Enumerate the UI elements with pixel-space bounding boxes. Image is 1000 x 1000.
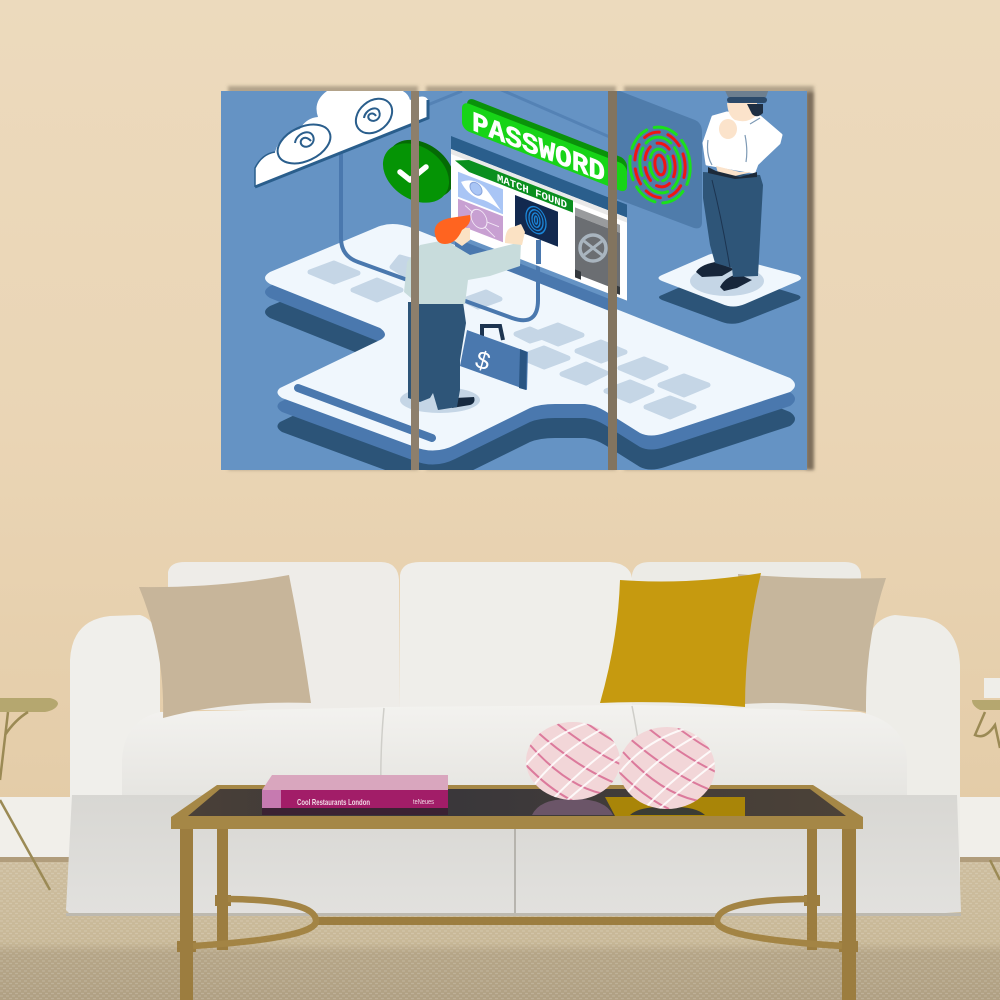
guard face bbox=[727, 103, 757, 121]
yellow pillow reflection bbox=[605, 797, 745, 816]
platform top surface bbox=[265, 224, 795, 451]
man shirt bbox=[404, 240, 521, 304]
screen body bbox=[451, 149, 627, 301]
pillow yellow bbox=[600, 573, 761, 707]
guard cap bbox=[725, 91, 768, 103]
floor edge bbox=[0, 857, 1000, 862]
guard belt bbox=[708, 167, 757, 179]
pillow left bbox=[139, 575, 311, 718]
canvas background bbox=[221, 91, 807, 470]
table glass bbox=[188, 789, 846, 816]
guard hair bbox=[747, 104, 763, 116]
man head bbox=[453, 228, 470, 246]
floor shadow bbox=[400, 387, 480, 413]
guard figure bbox=[696, 86, 781, 291]
eye tile bbox=[458, 172, 503, 214]
panel shadows on wall bbox=[228, 86, 814, 470]
screen shelf shadow bbox=[455, 238, 612, 312]
left arm bbox=[70, 615, 160, 900]
space bar bbox=[298, 388, 432, 438]
man hand bbox=[505, 224, 525, 245]
side table right bbox=[972, 678, 1000, 880]
guard belly bbox=[716, 166, 752, 176]
back cushion left bbox=[168, 562, 400, 710]
table stretcher bbox=[316, 917, 717, 925]
guard platform bbox=[658, 254, 801, 324]
side table left bbox=[0, 698, 58, 890]
keyboard keys bbox=[310, 257, 708, 417]
match found banner bbox=[455, 160, 573, 213]
cloud swirl left bbox=[276, 124, 332, 164]
fingerprint tile bbox=[515, 195, 558, 247]
background circuit lines bbox=[430, 91, 608, 138]
man trousers bbox=[408, 302, 466, 410]
seat cushion right bbox=[640, 705, 907, 796]
gap between left and middle panels bbox=[411, 91, 419, 470]
fingerprint wall panel bbox=[612, 88, 702, 228]
briefcase bbox=[460, 326, 528, 390]
cloud swirl right bbox=[354, 98, 394, 134]
table hoops bbox=[193, 899, 842, 946]
coffee table bbox=[171, 785, 863, 1000]
sofa skirt bbox=[66, 795, 961, 916]
keyboard platform bbox=[265, 224, 795, 485]
carpet bbox=[0, 862, 1000, 1000]
sofa bbox=[66, 562, 961, 916]
seat cushion left bbox=[122, 707, 390, 796]
seat cushion centre bbox=[382, 705, 644, 796]
back cushion right bbox=[632, 562, 861, 710]
back cushion centre bbox=[400, 562, 632, 710]
platform side bbox=[265, 285, 795, 464]
guard hand bbox=[719, 119, 737, 139]
vase reflections bbox=[532, 799, 613, 815]
match found banner: MATCH FOUND bbox=[497, 173, 567, 212]
guard trousers bbox=[703, 172, 763, 277]
pillow right bbox=[738, 574, 886, 712]
platform cast shadow bbox=[265, 302, 795, 470]
cloud bbox=[255, 89, 428, 187]
book bbox=[262, 775, 448, 815]
check badge bbox=[382, 140, 451, 203]
guard shoes bbox=[696, 262, 734, 277]
vase left bbox=[525, 720, 622, 802]
table top frame bbox=[171, 785, 863, 829]
table legs bbox=[177, 829, 858, 1000]
book title: Cool Restaurants London bbox=[297, 797, 370, 807]
right arm bbox=[866, 615, 960, 900]
fingerprint post bbox=[536, 240, 541, 264]
man figure bbox=[400, 215, 525, 413]
baseboard left bbox=[0, 797, 72, 857]
dollar sign: $ bbox=[472, 346, 493, 376]
safe bbox=[575, 207, 620, 295]
book publisher: teNeues bbox=[413, 799, 434, 806]
triptych canvas artwork bbox=[221, 86, 807, 485]
password sign bbox=[462, 99, 627, 192]
man hair bbox=[435, 215, 470, 244]
gap between middle and right panels bbox=[608, 91, 617, 470]
cable from cloud to fingerprint post bbox=[341, 150, 538, 320]
vase right bbox=[618, 726, 716, 810]
face recognition tile bbox=[458, 199, 503, 242]
screen bbox=[451, 136, 627, 301]
screen header band bbox=[451, 136, 627, 218]
safe wheel bbox=[580, 235, 606, 261]
fingerprint scan bbox=[628, 126, 692, 204]
guard shirt bbox=[704, 113, 781, 172]
baseboard right bbox=[955, 797, 1000, 857]
password text: PASSWORD bbox=[472, 107, 605, 190]
man shoe bbox=[452, 397, 474, 408]
